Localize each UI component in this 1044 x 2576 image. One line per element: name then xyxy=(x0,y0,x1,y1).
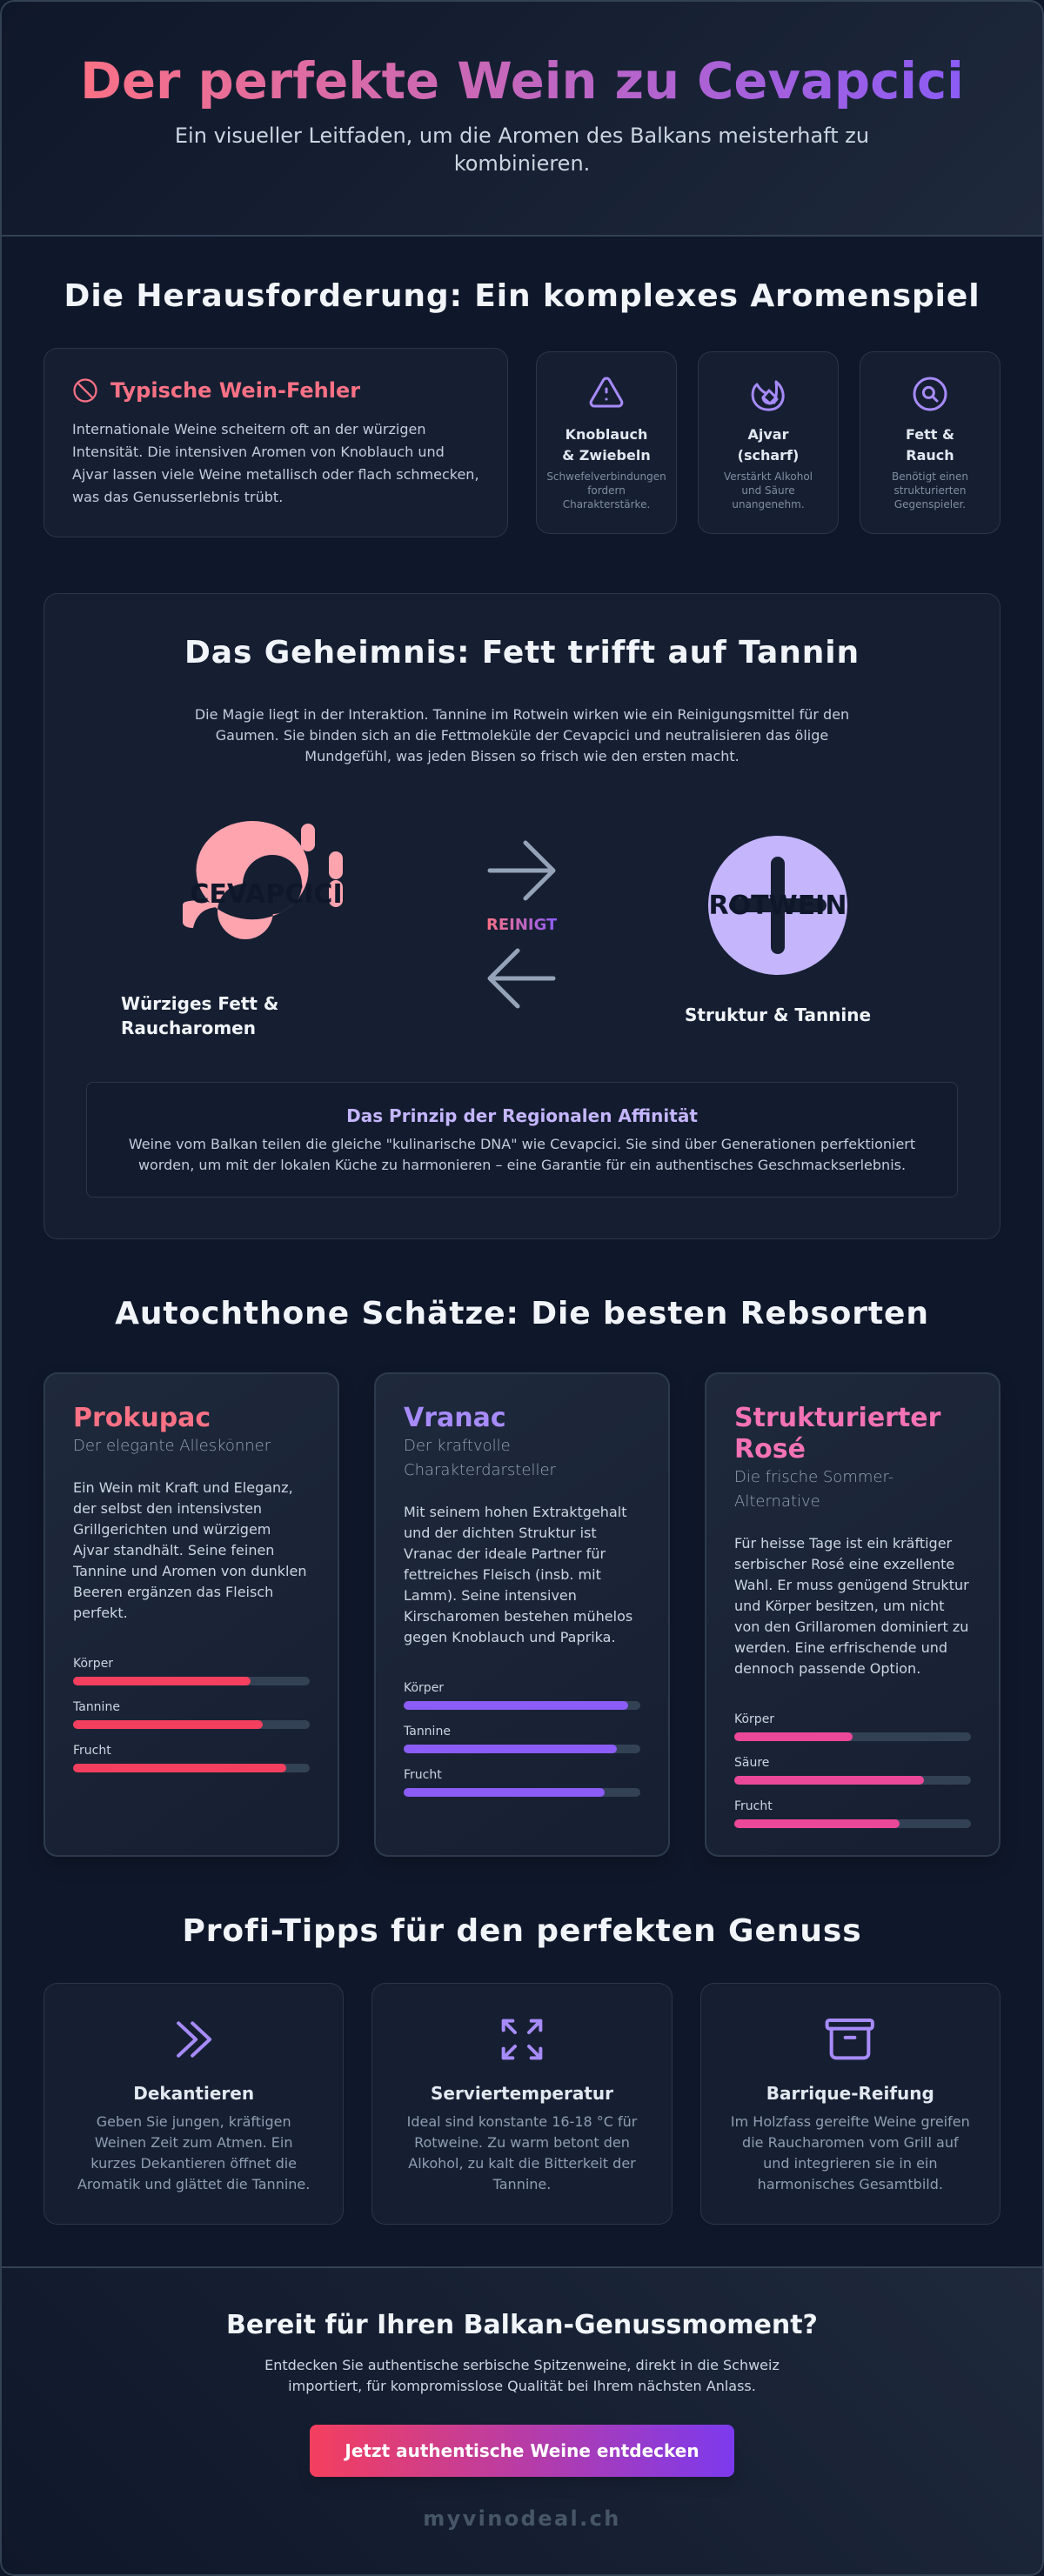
label: ajvar xyxy=(738,426,799,464)
text: fat and smoke xyxy=(892,470,968,511)
text: Prokupac: Tannine und Aromen von dunklen xyxy=(73,1563,306,1579)
panel: typical wine mistakes xyxy=(44,348,508,537)
text: structured rosé xyxy=(734,1535,969,1677)
text: regional affinity: worden, um mit der lokalen Küche zu harmonieren – eine Garantie für ein authentisches Geschmackserlebnis. xyxy=(138,1157,906,1173)
text: regional affinity xyxy=(129,1136,915,1173)
metrics: structured rosé: Körper xyxy=(734,1712,774,1726)
text: decanting xyxy=(77,2113,310,2192)
name: structured rosé: Rosé xyxy=(734,1434,806,1465)
text: structured rosé: serbischer Rosé eine exzellente xyxy=(734,1556,954,1572)
header panel xyxy=(0,0,1044,237)
text: ajvar: unangenehm. xyxy=(732,498,805,511)
card: fat and smoke xyxy=(860,351,1000,534)
text: typical wine mistakes: Intensität. Die intensiven Aromen von Knoblauch und xyxy=(72,444,445,460)
heading: regional affinity: Das Prinzip der Regionalen Affinität xyxy=(346,1105,698,1126)
label: spicy fat xyxy=(121,993,278,1038)
icon: search circle xyxy=(914,377,947,410)
label: fat and smoke: Fett & xyxy=(906,426,954,443)
label: fat and smoke: Rauch xyxy=(906,447,954,464)
text: decanting: Geben Sie jungen, kräftigen xyxy=(97,2113,291,2130)
icon: cevapcici xyxy=(183,821,343,939)
bar: Körper 95% xyxy=(404,1701,640,1710)
label: cleanses: REINIGT xyxy=(486,916,557,934)
label: garlic and onions: Knoblauch xyxy=(566,426,647,443)
card: Vranac xyxy=(374,1372,670,1857)
text: barrique aging xyxy=(731,2113,970,2192)
text: Prokupac: perfekt. xyxy=(73,1605,128,1621)
text: garlic and onions xyxy=(546,470,666,511)
metrics: Prokupac: Tannine xyxy=(73,1700,120,1714)
text: garlic and onions: fordern xyxy=(587,484,626,497)
text: ajvar xyxy=(724,470,813,511)
metrics: Prokupac: Körper xyxy=(73,1657,113,1671)
heading: grape varieties: Autochthone Schätze: Die besten Rebsorten xyxy=(115,1296,929,1331)
bar: Frucht 70% xyxy=(734,1819,971,1828)
heading: call to action: Bereit für Ihren Balkan-Genussmoment? xyxy=(226,2310,818,2340)
section: grape varieties xyxy=(44,1296,1000,1857)
tagline: structured rosé xyxy=(734,1468,893,1511)
card: structured rosé xyxy=(705,1372,1000,1857)
label: garlic and onions xyxy=(562,426,651,464)
text: structured rosé: Wahl. Er muss genügend Struktur xyxy=(734,1577,969,1593)
bar: Körper 75% xyxy=(73,1677,310,1685)
text: barrique aging: Im Holzfass gereifte Weine greifen xyxy=(731,2113,970,2130)
card: decanting xyxy=(44,1983,344,2225)
card: ajvar xyxy=(698,351,839,534)
name: Vranac: Vranac xyxy=(404,1403,506,1433)
brand: myvinodeal.ch xyxy=(423,2506,621,2531)
text: decanting: Weinen Zeit zum Atmen. Ein xyxy=(95,2134,292,2151)
heading: challenge: Die Herausforderung: Ein komplexes Aromenspiel xyxy=(64,278,980,314)
text: Prokupac: der selbst den intensivsten xyxy=(73,1500,262,1517)
metrics: Prokupac xyxy=(73,1657,310,1772)
card: Prokupac xyxy=(44,1372,339,1857)
metrics: Vranac: Frucht xyxy=(404,1768,442,1782)
title: Der perfekte Wein zu Cevapcici xyxy=(80,52,964,110)
icon: cevapcici: CEVAPCICI xyxy=(190,879,343,910)
metrics: Vranac: Tannine xyxy=(404,1725,451,1738)
text: garlic and onions: Schwefelverbindungen xyxy=(546,470,666,483)
text: serving temperature: Rotweine. Zu warm betont den xyxy=(414,2134,630,2151)
text: garlic and onions: Charakterstärke. xyxy=(563,498,650,511)
footer panel: call to action xyxy=(0,2266,1044,2576)
metrics: Vranac: Körper xyxy=(404,1681,444,1695)
label: barrique aging: Barrique-Reifung xyxy=(766,2083,934,2104)
icon: warning triangle xyxy=(590,377,623,407)
text: serving temperature: Ideal sind konstante 16-18 °C für xyxy=(407,2113,637,2130)
card: serving temperature xyxy=(371,1983,673,2225)
icon: red wine xyxy=(708,836,847,975)
label: ajvar: (scharf) xyxy=(738,447,799,464)
metrics: structured rosé: Frucht xyxy=(734,1799,773,1813)
text: decanting: Aromatik und glättet die Tannine. xyxy=(77,2176,310,2192)
label: structure and tannins: Struktur & Tannine xyxy=(685,1004,871,1025)
icon: red wine: ROTWEIN xyxy=(709,891,847,921)
text: typical wine mistakes: was das Genusserlebnis trübt. xyxy=(72,489,283,505)
tagline: Vranac: Der kraftvolle xyxy=(404,1437,511,1455)
text: regional affinity: Weine vom Balkan teilen die gleiche "kulinarische DNA" wie Cevapcici. Sie sind über Generationen perfektioniert xyxy=(129,1136,915,1152)
label: spicy fat: Würziges Fett & xyxy=(121,993,278,1014)
icon: flame xyxy=(752,380,785,411)
text: fat and smoke: Gegenspieler. xyxy=(894,498,966,511)
text: Prokupac: Grillgerichten und würzigem xyxy=(73,1521,271,1538)
subtitle: kombinieren. xyxy=(454,151,590,176)
text: Vranac: fettreiches Fleisch (insb. mit xyxy=(404,1566,601,1583)
panel: the secret xyxy=(44,593,1000,1239)
text: serving temperature: Tannine. xyxy=(493,2176,551,2192)
heading: pro tips: Profi-Tipps für den perfekten Genuss xyxy=(182,1913,862,1949)
text: structured rosé: und Körper besitzen, um nicht xyxy=(734,1598,944,1614)
metrics: Prokupac: Frucht xyxy=(73,1744,111,1758)
bar: Tannine 90% xyxy=(404,1745,640,1753)
callout: regional affinity xyxy=(86,1082,958,1198)
icon: ban xyxy=(73,378,97,403)
text: fat and smoke: strukturierten xyxy=(893,484,967,497)
text: structured rosé: Für heisse Tage ist ein kräftiger xyxy=(734,1535,952,1552)
text: Vranac: gegen Knoblauch und Paprika. xyxy=(404,1629,616,1645)
text: structured rosé: von den Grillaromen dominiert zu xyxy=(734,1618,968,1635)
bar: Tannine 80% xyxy=(73,1720,310,1729)
text: Vranac: Lamm). Seine intensiven xyxy=(404,1587,577,1604)
bar: Körper 50% xyxy=(734,1732,971,1741)
text: Prokupac: Ajvar standhält. Seine feinen xyxy=(73,1542,274,1558)
metrics: structured rosé xyxy=(734,1712,971,1828)
bar: Säure 80% xyxy=(734,1776,971,1785)
metrics: Vranac xyxy=(404,1681,640,1797)
heading: the secret: Das Geheimnis: Fett trifft auf Tannin xyxy=(184,635,860,671)
text: typical wine mistakes: Ajvar lassen viele Weine metallisch oder flach schmecken, xyxy=(72,466,479,483)
text: Prokupac: Ein Wein mit Kraft und Eleganz, xyxy=(73,1479,293,1496)
text: call to action: importiert, für kompromisslose Qualität bei Ihrem nächsten Anlass. xyxy=(288,2378,756,2394)
icon: double chevron xyxy=(177,2021,212,2058)
label: spicy fat: Raucharomen xyxy=(121,1018,256,1038)
text: ajvar: und Säure xyxy=(741,484,795,497)
text: Vranac: Vranac der ideale Partner für xyxy=(404,1545,606,1562)
subtitle xyxy=(175,123,869,176)
label: serving temperature: Serviertemperatur xyxy=(431,2083,613,2104)
icon: archive box xyxy=(825,2019,874,2059)
text: Vranac: und der dichten Struktur ist xyxy=(404,1525,597,1541)
tagline: Vranac xyxy=(404,1437,556,1479)
section: pro tips xyxy=(44,1913,1000,2225)
metrics: structured rosé: Säure xyxy=(734,1756,769,1770)
text: barrique aging: die Raucharomen vom Grill auf xyxy=(742,2134,959,2151)
text: Vranac: Mit seinem hohen Extraktgehalt xyxy=(404,1504,626,1520)
tagline: structured rosé: Alternative xyxy=(734,1492,820,1511)
text: Prokupac xyxy=(73,1479,306,1621)
label: garlic and onions: & Zwiebeln xyxy=(562,447,651,464)
text: structured rosé: dennoch passende Option. xyxy=(734,1660,920,1677)
text: the secret xyxy=(195,706,849,764)
name: structured rosé xyxy=(734,1403,941,1465)
text: Prokupac: Beeren ergänzen das Fleisch xyxy=(73,1584,273,1600)
text: decanting: kurzes Dekantieren öffnet die xyxy=(90,2155,297,2172)
text: Vranac: Kirscharomen bestehen mühelos xyxy=(404,1608,632,1625)
text: serving temperature xyxy=(407,2113,637,2192)
text: Vranac xyxy=(404,1504,632,1645)
label: decanting: Dekantieren xyxy=(133,2083,254,2104)
text: structured rosé: werden. Eine erfrischende und xyxy=(734,1639,947,1656)
card: garlic and onions xyxy=(536,351,677,534)
tagline: Prokupac: Der elegante Alleskönner xyxy=(73,1437,271,1455)
text: the secret: Die Magie liegt in der Interaktion. Tannine im Rotwein wirken wie ein Reinigungsmittel für den xyxy=(195,706,849,723)
text: typical wine mistakes: Internationale Weine scheitern oft an der würzigen xyxy=(72,421,425,437)
button: discover wines xyxy=(310,2425,734,2477)
text: barrique aging: und integrieren sie in ein xyxy=(763,2155,938,2172)
button: discover wines: Jetzt authentische Weine entdecken xyxy=(345,2440,699,2461)
label: fat and smoke xyxy=(906,426,954,464)
text: call to action: Entdecken Sie authentische serbische Spitzenweine, direkt in die Schweiz xyxy=(264,2357,780,2373)
text: call to action xyxy=(264,2357,780,2394)
text: serving temperature: Alkohol, zu kalt die Bitterkeit der xyxy=(408,2155,636,2172)
text: the secret: Gaumen. Sie binden sich an die Fettmoleküle der Cevapcici und neutralisieren das ölige xyxy=(216,727,828,744)
tagline: Vranac: Charakterdarsteller xyxy=(404,1461,556,1479)
card: barrique aging xyxy=(700,1983,1000,2225)
text: fat and smoke: Benötigt einen xyxy=(892,470,968,483)
subtitle: Ein visueller Leitfaden, um die Aromen des Balkans meisterhaft zu xyxy=(175,123,869,148)
icon: expand arrows xyxy=(501,2019,543,2059)
name: structured rosé: Strukturierter xyxy=(734,1403,940,1433)
tagline: structured rosé: Die frische Sommer- xyxy=(734,1468,893,1486)
bar: Frucht 85% xyxy=(404,1788,640,1797)
text: the secret: Mundgefühl, was jeden Bissen so frisch wie den ersten macht. xyxy=(304,748,740,764)
heading: typical wine mistakes: Typische Wein-Fehler xyxy=(110,378,360,403)
arrows: cleansing interaction xyxy=(487,840,555,1009)
name: Prokupac: Prokupac xyxy=(73,1403,211,1433)
bar: Frucht 90% xyxy=(73,1764,310,1772)
text: barrique aging: harmonisches Gesamtbild. xyxy=(758,2176,943,2192)
text: ajvar: Verstärkt Alkohol xyxy=(724,470,813,483)
label: ajvar: Ajvar xyxy=(748,426,788,443)
section: challenge xyxy=(44,278,1000,537)
text: typical wine mistakes xyxy=(72,421,479,505)
